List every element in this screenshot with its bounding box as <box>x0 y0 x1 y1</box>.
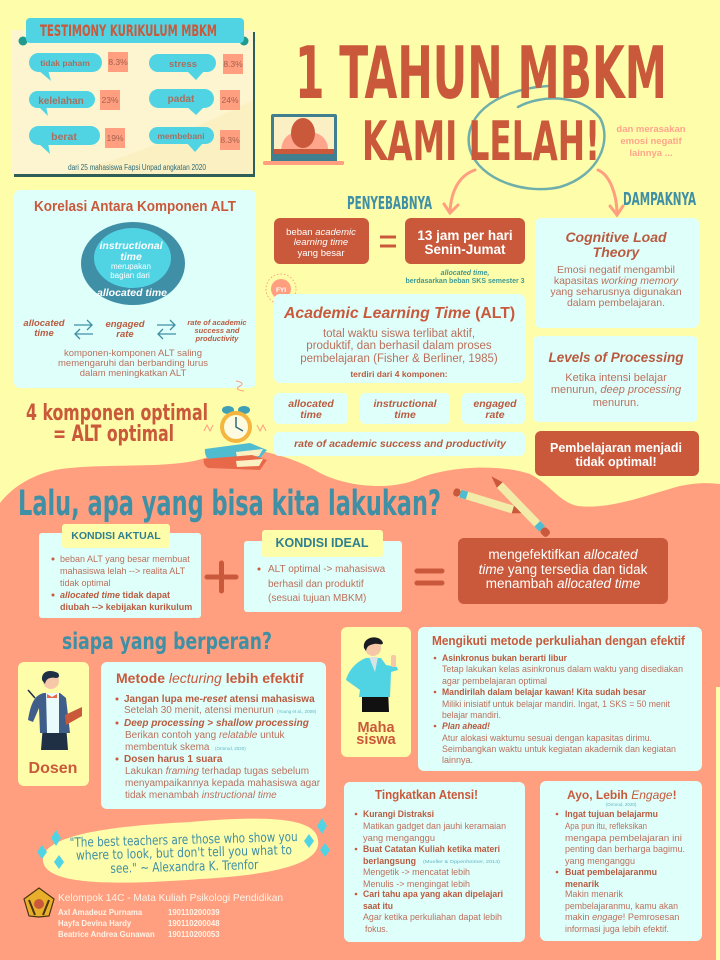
panel: mengikuti metode: Mandirilah dalam belajar kawan! Kita sudah besar <box>442 687 646 697</box>
panel: lebih engage: (Ormrod, 2020) <box>606 802 637 807</box>
panel: 13 jam: 13 jam per hari <box>417 228 513 243</box>
component: rate of academic success: rate of academic success and productivity <box>294 438 507 450</box>
component: instructional time: time <box>394 409 416 421</box>
bubbles and percentage notes: membebani <box>157 131 205 141</box>
panel: mengikuti metode <box>418 627 702 771</box>
panel: tingkatkan atensi: Agar ketika perkuliahan dapat lebih <box>363 912 502 923</box>
label: kondisi aktual: KONDISI AKTUAL <box>71 530 161 542</box>
text: group credits: Hayfa Devina Hardy <box>58 919 132 928</box>
panel: mengikuti metode: Tetap lakukan kelas asinkronus dalam waktu yang disediakan <box>442 664 683 674</box>
panel: pembelajaran tidak optimal <box>535 431 699 476</box>
panel: lebih engage: Buat pembelajaranmu <box>565 867 657 878</box>
panel: mengikuti metode: Miliki inisiatif untuk belajar mandiri. Ingat, 1 SKS = 50 menit <box>442 699 670 709</box>
panel: cognitive load theory: Theory <box>593 244 641 260</box>
panel: mengikuti metode: belajar mandiri. <box>442 710 501 720</box>
panel: academic learning time: produktif, dan berhasil dalam proses <box>306 340 492 352</box>
panel: levels of processing: menurun. <box>593 397 639 409</box>
panel: tingkatkan atensi: Matikan gadget dan jauhi keramaian <box>363 821 506 832</box>
panel: mengefektifkan: time yang tersedia dan tidak <box>479 562 648 577</box>
heading: siapa yang berperan: siapa yang berperan? <box>62 629 272 655</box>
panel: metode lecturing: membentuk skema <box>125 742 210 753</box>
component: allocated time: allocated <box>288 398 334 410</box>
text: group credits: 190110200039 <box>168 908 220 917</box>
bubbles and percentage notes <box>29 52 243 154</box>
panel: tingkatkan atensi: Tingkatkan Atensi! <box>375 787 478 802</box>
panel: kondisi aktual: tidak optimal <box>60 578 111 588</box>
label: kondisi ideal <box>262 530 383 557</box>
heading: lalu apa: Lalu, apa yang bisa kita lakukan? <box>18 484 441 524</box>
quote <box>37 818 330 883</box>
text: group credits: Axl Amadeuz Purnama <box>58 908 143 917</box>
panel: metode lecturing: Deep processing > shallow processing <box>124 718 309 729</box>
panel: lebih engage: makin engage! Pemrosesan <box>565 912 679 922</box>
diagram: component relation row: productivity <box>195 334 239 343</box>
panel: metode lecturing: Setelah 30 menit, atensi menurun <box>124 705 274 716</box>
panel: mengefektifkan: mengefektifkan allocated <box>488 547 638 562</box>
panel: tingkatkan atensi: Kurangi Distraksi <box>363 809 434 820</box>
arrow: to effects <box>598 170 623 215</box>
diagram: component relation row: success and <box>194 326 240 335</box>
icon: FYI badge <box>266 274 296 304</box>
bubbles and percentage notes: 8.3% <box>220 135 240 145</box>
text: group credits: Kelompok 14C - Mata Kuliah Psikologi Pendidikan <box>58 892 283 904</box>
panel: mengikuti metode: Mengikuti metode perkuliahan dengan efektif <box>432 634 686 648</box>
panel: metode lecturing: Jangan lupa me-reset atensi mahasiswa <box>124 694 315 705</box>
text: relation note <box>58 348 208 379</box>
tagline: dan merasakan <box>616 124 686 135</box>
panel: tingkatkan atensi <box>344 782 525 942</box>
panel: kondisi ideal: ALT optimal -> mahasiswa <box>268 564 386 575</box>
panel: beban ALT <box>274 218 369 264</box>
panel: lebih engage: yang menganggu <box>565 856 635 867</box>
panel: mengikuti metode: Seimbangkan waktu untuk kegiatan akademik dan kegiatan <box>442 744 676 754</box>
quote: where to look, but don't tell you what to <box>76 843 292 864</box>
icon: plus <box>207 563 236 591</box>
panel: metode lecturing: (Ormrod, 2020) <box>215 746 246 751</box>
panel: tingkatkan atensi: berlangsung <box>363 856 416 867</box>
bubbles and percentage notes: stress <box>169 59 197 70</box>
panel: metode lecturing: (Young et al., 2009) <box>277 709 317 714</box>
panel: levels of processing <box>533 336 698 422</box>
diagram: component relation row <box>23 318 247 343</box>
panel: mahasiswa <box>341 627 411 757</box>
component: allocated time: time <box>300 409 322 421</box>
panel: kondisi aktual: diubah --> kebijakan kurikulum <box>60 602 192 612</box>
panel: kondisi ideal: (sesuai tujuan MBKM) <box>268 593 366 604</box>
panel: cognitive load theory: dalam pembelajaran. <box>567 297 665 309</box>
panel: 13 jam: Senin-Jumat <box>424 242 506 257</box>
panel: kondisi aktual: mahasiswa lelah --> realita ALT <box>60 566 186 576</box>
panel: cognitive load theory: Emosi negatif mengambil <box>557 264 675 276</box>
heading: causes: PENYEBABNYA <box>347 193 432 214</box>
tagline: lainnya ... <box>629 148 673 159</box>
icon: pencils <box>452 474 551 538</box>
panel: metode lecturing: menyampaikannya kepada mahasiswa agar <box>125 778 321 789</box>
bubbles and percentage notes: 23% <box>101 95 119 105</box>
panel: mahasiswa: Maha <box>357 720 395 736</box>
diagram: nested ellipses: merupakan <box>111 262 151 271</box>
panel: cognitive load theory: Cognitive Load <box>565 229 667 245</box>
panel: tingkatkan atensi: Cari tahu apa yang akan dipelajari <box>363 889 503 900</box>
panel: tingkatkan atensi: (Mueller & Oppenheimer, 2014) <box>423 859 501 864</box>
panel: tingkatkan atensi: Buat Catatan Kuliah ketika materi <box>363 844 500 855</box>
panel: metode lecturing: Berikan contoh yang relatable untuk <box>125 730 286 741</box>
tagline: emosi negatif <box>620 136 682 147</box>
tagline <box>616 124 686 159</box>
icon: laptop with tired student <box>263 114 344 165</box>
text: allocated time note: allocated time, <box>441 270 489 277</box>
text: group credits: 190110200053 <box>168 930 220 939</box>
panel: korelasi ALT <box>14 190 256 388</box>
component: engaged rate: rate <box>485 409 505 421</box>
panel: tingkatkan atensi: fokus. <box>365 924 388 935</box>
diagram: component relation row: allocated <box>23 318 65 329</box>
panel: tingkatkan atensi: yang menganggu <box>363 833 435 844</box>
panel: metode lecturing <box>101 662 326 809</box>
text: allocated time note: berdasarkan beban SKS semester 3 <box>405 278 525 285</box>
quote: "The best teachers are those who show you <box>70 830 298 851</box>
bubbles and percentage notes: 24% <box>221 95 239 105</box>
panel: lebih engage: menarik <box>565 879 600 890</box>
panel: metode lecturing: Metode lecturing lebih efektif <box>116 670 304 686</box>
panel: beban ALT: learning time <box>294 237 348 248</box>
panel: mengikuti metode: agar pembelajaran optimal <box>442 676 547 686</box>
panel: lebih engage: Ayo, Lebih Engage! <box>567 788 677 802</box>
bubbles and percentage notes: berat <box>51 131 77 143</box>
bubbles and percentage notes: 8.3% <box>108 57 128 67</box>
heading: testimony banner <box>26 18 244 43</box>
panel: academic learning time: Academic Learning Time (ALT) <box>283 305 515 322</box>
component: allocated time <box>274 393 348 424</box>
panel: tingkatkan atensi: Menulis -> mengingat lebih <box>363 879 470 890</box>
text: 4 komponen optimal: = ALT optimal <box>53 422 174 447</box>
icon: hand-drawn circle around lelah <box>469 86 604 189</box>
panel: testimony <box>11 18 255 177</box>
panel: levels of processing: menurun, deep processing <box>551 384 682 396</box>
panel: metode lecturing: Dosen harus 1 suara <box>124 754 223 765</box>
panel: cognitive load theory <box>535 218 699 328</box>
icon: FYI badge: FYI <box>276 287 286 294</box>
panel: lebih engage: informasi juga lebih efektif. <box>565 924 669 935</box>
title: KAMI LELAH! <box>362 110 600 173</box>
diagram: component relation row: rate <box>116 329 134 340</box>
icon: university logo <box>24 888 54 917</box>
bubbles and percentage notes: 19% <box>106 133 124 143</box>
diagram: nested ellipses: bagian dari <box>110 271 150 280</box>
panel: cognitive load theory: yang seharusnya digunakan <box>550 286 682 298</box>
component: engaged rate <box>462 393 525 424</box>
panel: beban ALT: yang besar <box>297 248 345 259</box>
panel: 13 jam <box>405 218 525 264</box>
panel: academic learning time <box>274 294 525 383</box>
diagram: component relation row: engaged <box>105 319 145 330</box>
panel: pembelajaran tidak optimal: Pembelajaran menjadi <box>550 441 682 455</box>
text: relation note: dalam meningkatkan ALT <box>80 368 186 379</box>
panel: lebih engage: Ingat tujuan belajarmu <box>565 809 658 820</box>
panel: academic learning time: total waktu siswa terlibat aktif, <box>323 328 475 340</box>
panel: mahasiswa: siswa <box>356 732 397 748</box>
panel: kondisi aktual: allocated time tidak dapat <box>60 590 170 600</box>
panel: lebih engage <box>540 781 702 941</box>
diagram: nested ellipses: time <box>120 251 142 263</box>
icon: equals <box>417 571 442 583</box>
diagram: nested ellipses <box>81 222 185 305</box>
panel: pembelajaran tidak optimal: tidak optimal! <box>575 455 657 469</box>
text: group credits: Beatrice Andrea Gunawan <box>58 930 155 939</box>
panel: dosen <box>18 662 89 786</box>
testimony footnote: dari 25 mahasiswa Fapsi Unpad angkatan 2020 <box>68 163 206 172</box>
icon: student figure <box>346 637 398 712</box>
component: instructional time: instructional <box>373 398 438 410</box>
panel: kondisi ideal: berhasil dan produktif <box>268 579 364 590</box>
bubbles and percentage notes: padat <box>168 94 195 105</box>
title <box>295 31 667 173</box>
component: instructional time <box>360 393 450 424</box>
text: relation note: komponen-komponen ALT saling <box>64 348 202 359</box>
panel: mengikuti metode: Plan ahead! <box>442 721 490 731</box>
panel: academic learning time: pembelajaran (Fisher & Berliner, 1985) <box>300 353 498 365</box>
heading: Korelasi Antara Komponen ALT <box>34 199 236 215</box>
panel: lebih engage: mengapa pembelajaran ini <box>565 833 682 844</box>
diagram: nested ellipses: allocated time <box>97 287 167 299</box>
text: 4 komponen optimal: 4 komponen optimal <box>26 401 208 426</box>
panel: mengikuti metode: Atur alokasi waktumu sesuai dengan kapasitas dirimu. <box>442 733 652 743</box>
label: kondisi aktual <box>62 524 170 548</box>
panel: mengefektifkan <box>458 538 668 604</box>
panel: levels of processing: Ketika intensi belajar <box>565 372 667 384</box>
component: rate of academic success <box>274 432 525 456</box>
panel: kondisi aktual <box>39 524 201 618</box>
icon: alarm clock on books <box>204 381 267 470</box>
salmon wave background <box>0 450 720 960</box>
panel: beban ALT: beban academic <box>286 227 356 238</box>
bubbles and percentage notes: kelelahan <box>38 96 84 107</box>
text: group credits <box>58 892 283 939</box>
text: group credits: 190110200048 <box>168 919 220 928</box>
panel: kondisi aktual: beban ALT yang besar membuat <box>60 554 190 564</box>
panel: mengefektifkan: menambah allocated time <box>486 576 640 591</box>
panel: lebih engage: penting dan berharga bagimu. <box>565 844 685 855</box>
label: kondisi ideal: KONDISI IDEAL <box>275 536 369 550</box>
text: 4 komponen optimal <box>26 401 208 447</box>
text: allocated time note <box>405 270 525 285</box>
diagram: component relation row: rate of academic <box>187 318 247 327</box>
bubbles and percentage notes: tidak paham <box>40 58 90 68</box>
diagram: component relation row: time <box>34 328 54 339</box>
panel: academic learning time: terdiri dari 4 komponen: <box>350 369 448 379</box>
panel: tingkatkan atensi: saat itu <box>363 901 393 912</box>
panel: dosen: Dosen <box>29 760 77 777</box>
heading: testimony banner: TESTIMONY KURIKULUM MBKM <box>40 21 217 40</box>
panel: mengikuti metode: Asinkronus bukan berarti libur <box>442 653 567 663</box>
icon: equals <box>380 237 396 246</box>
panel: kondisi ideal <box>244 530 402 612</box>
text: relation note: memengaruhi dan berbanding lurus <box>58 358 208 369</box>
icon: lecturer figure <box>28 671 82 750</box>
panel: lebih engage: Apa pun itu, refleksikan <box>565 821 647 832</box>
panel: metode lecturing: Lakukan framing terhadap tugas sebelum <box>125 766 309 777</box>
diagram: nested ellipses: instructional <box>99 240 164 252</box>
quote: see." ~ Alexandra K. Trenfor <box>110 858 259 877</box>
arrow: to causes <box>444 170 475 213</box>
panel: levels of processing: Levels of Processing <box>548 350 684 365</box>
panel: metode lecturing: tidak menambah instructional time <box>125 790 277 801</box>
panel: lebih engage: pembelajaranmu, kamu akan <box>565 901 678 912</box>
bubbles and percentage notes: 8.3% <box>223 59 243 69</box>
panel: lebih engage: Makin menarik <box>565 889 623 900</box>
panel: cognitive load theory: kapasitas working memory <box>554 275 679 287</box>
component: engaged rate: engaged <box>473 398 517 410</box>
panel: mengikuti metode: lainnya. <box>442 755 473 765</box>
panel: tingkatkan atensi: Mengetik -> mencatat lebih <box>363 867 470 878</box>
